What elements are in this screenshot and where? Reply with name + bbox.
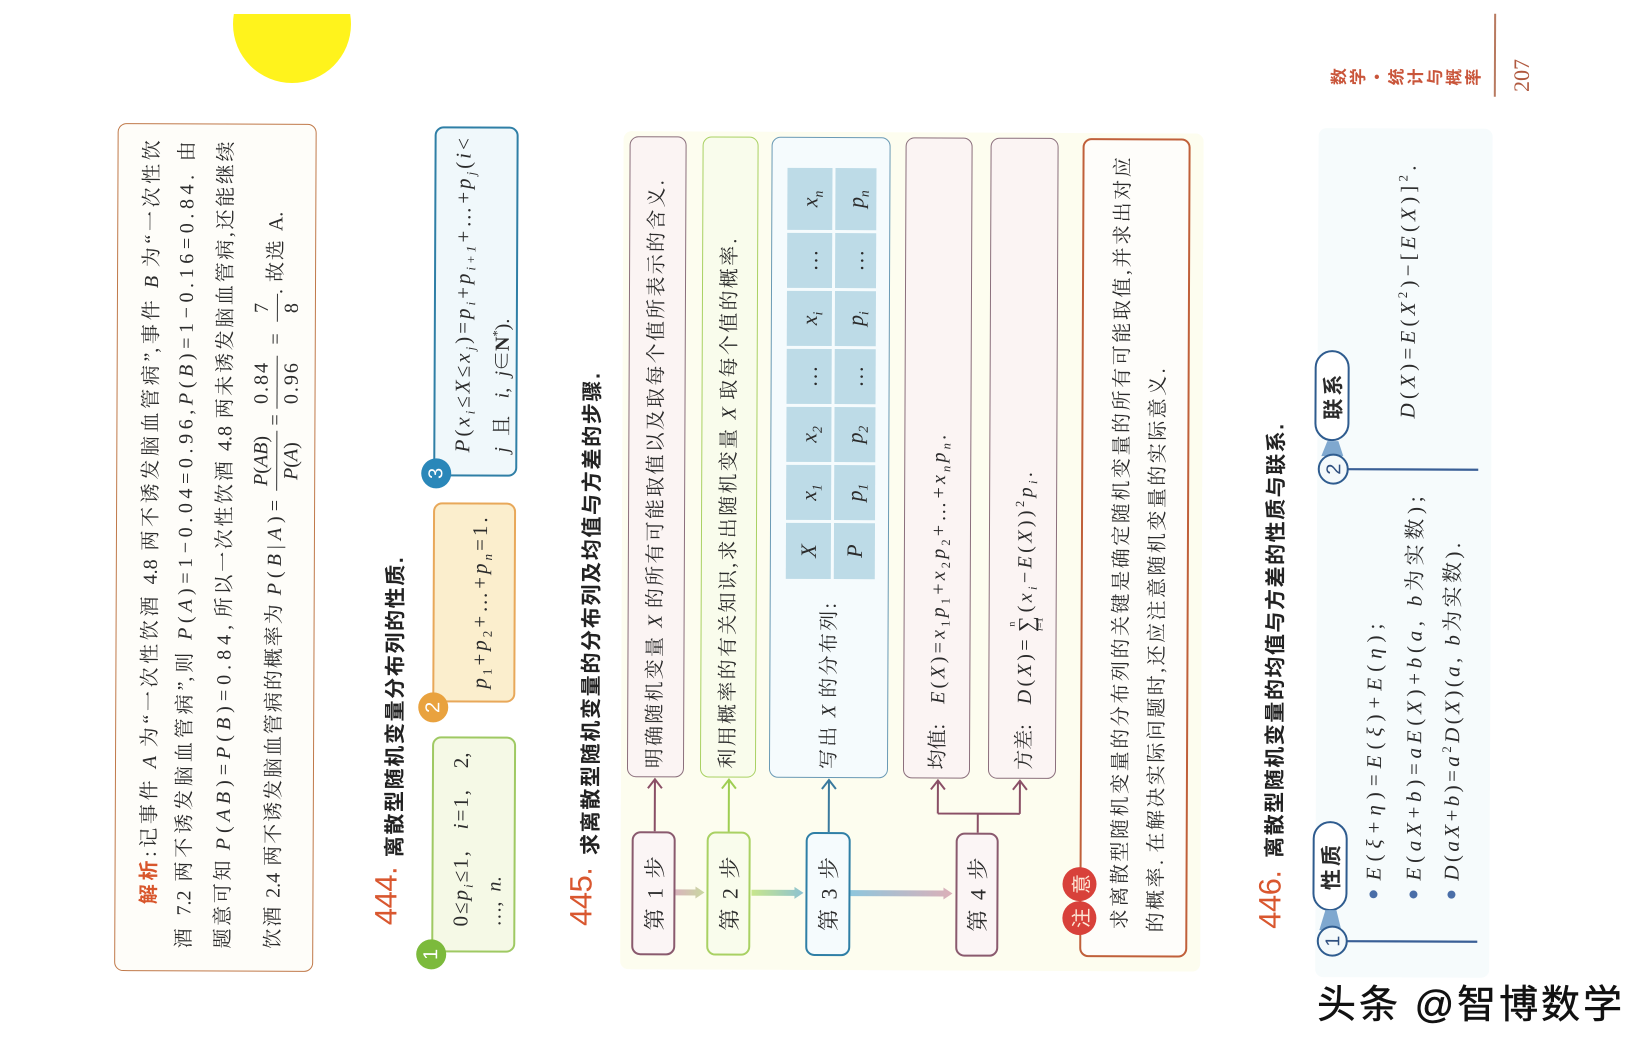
- property 3 formula: P(xi≤X≤xj)=pi+pi+1+…+pj(i<: [450, 135, 479, 453]
- variance formula: [1007, 469, 1046, 770]
- heading 445: [563, 373, 605, 926]
- property 1 formula: [448, 752, 506, 927]
- distribution table: xn: [797, 191, 825, 207]
- step details 2: [700, 136, 759, 778]
- variance formula: ∑: [1014, 616, 1039, 632]
- distribution table: p1: [842, 484, 870, 502]
- badge 1: 1: [420, 949, 442, 960]
- step box 1: 第 1 步: [642, 856, 667, 930]
- distribution table: …: [797, 249, 822, 271]
- panel: property 1: [431, 736, 516, 953]
- step 3 text: 写出 X 的分布列:: [818, 603, 841, 769]
- marker 2 with line: [1319, 441, 1478, 484]
- arrow: step 1 to step 2: [675, 886, 704, 898]
- distribution table: x1: [796, 484, 824, 501]
- marker 1 with line: [1318, 910, 1477, 956]
- properties pill: 性质: [1320, 842, 1343, 890]
- mean formula: E(X)=x1p1+x2p2+…+xnpn.: [927, 432, 953, 704]
- distribution table: pn: [843, 190, 871, 208]
- property 1 formula: 0≤pi≤1, i=1, 2,: [448, 752, 476, 927]
- solution text block: 0.96: [281, 361, 303, 404]
- property 1 formula: …, n.: [483, 877, 506, 927]
- step box 4: 第 4 步: [965, 858, 991, 932]
- decorative yellow thumb tab: [233, 14, 351, 83]
- distribution table: pi: [842, 311, 871, 326]
- distribution table: p2: [842, 426, 870, 444]
- mean formula: 均值:: [927, 724, 949, 770]
- attention badge: [1062, 867, 1096, 936]
- relation pill: [1314, 350, 1350, 441]
- chapter label: 数学・统计与概率: [1330, 69, 1484, 89]
- watermark: 头条 @智博数学: [1317, 984, 1622, 1027]
- solution text block: [138, 140, 303, 949]
- property 3 formula: [450, 135, 514, 455]
- properties bullets: E(ξ+η)=E(ξ)+E(η);: [1362, 618, 1387, 880]
- property 2 formula: p1+p2+…+pn=1.: [467, 514, 495, 689]
- title 446: 离散型随机变量的均值与方差的性质与联系.: [1264, 424, 1288, 858]
- step details 3 with table: [769, 137, 891, 778]
- panel: 446 background: [1315, 128, 1493, 978]
- solution text block: P(A): [280, 442, 302, 480]
- relation formula: D(X)=E(X2)−[E(X)]2.: [1395, 161, 1421, 418]
- variance formula: 方差:: [1014, 724, 1036, 770]
- badge 1: [416, 939, 446, 969]
- marker 1 with line: 1: [1322, 936, 1344, 947]
- note text: [1109, 157, 1170, 932]
- step box 2: [706, 832, 751, 956]
- step 1 text: 明确随机变量 X 的所有可能取值以及取每个值所表示的含义.: [644, 180, 668, 768]
- badge 3: [421, 458, 451, 488]
- step box 3: 第 3 步: [816, 857, 842, 931]
- solution text block: 饮酒 2.4 两不诱发脑血管病的概率为 P(B|A)=. 故选 A.: [262, 212, 287, 949]
- solution text block: 0.84: [251, 361, 273, 404]
- properties bullets: E(aX+b)=aE(X)+b(a, b为实数);: [1402, 492, 1427, 881]
- solution text block: P(AB): [250, 436, 272, 486]
- solution text block: 8: [281, 303, 303, 313]
- number 445: 445.: [563, 868, 599, 926]
- distribution table: X: [795, 544, 820, 558]
- distribution table: …: [843, 250, 868, 272]
- step box 2: 第 2 步: [717, 857, 742, 931]
- step details 4: variance: [988, 138, 1059, 779]
- step details 4: mean: [903, 137, 973, 779]
- fork arrow: step 4 to mean and variance: [931, 780, 1027, 833]
- number 446: 446.: [1252, 870, 1288, 929]
- step box 1: [631, 831, 676, 955]
- distribution table: …: [842, 366, 867, 388]
- panel: worked solution: [114, 123, 317, 972]
- arrow: step 3 to detail: [822, 780, 836, 832]
- badge 2: 2: [422, 702, 444, 713]
- solution text block: 7: [251, 303, 273, 313]
- distribution table: [786, 168, 876, 580]
- step box 3: [805, 832, 851, 956]
- badge 3: 3: [425, 468, 447, 479]
- arrow: step 2 to detail: [722, 780, 736, 832]
- property 3 formula: j 且 i, j∈N*).: [490, 319, 514, 453]
- arrow: step 2 to step 3: [751, 887, 803, 899]
- heading 444: [368, 557, 408, 925]
- solution text block: =: [265, 414, 287, 426]
- step details 1: [627, 136, 687, 777]
- properties bullets: D(aX+b)=a2D(X)(a, b为实数).: [1439, 539, 1465, 881]
- panel: property 3: [433, 126, 519, 477]
- marker 2 with line: 2: [1323, 464, 1345, 475]
- solution text block: 酒 7.2 两不诱发脑血管病”,则 P(A)=1−0.04=0.96,P(B)=1−0.16=0.84. 由: [173, 141, 199, 948]
- header rule: [1494, 14, 1496, 97]
- solution text block: 题意可知 P(AB)=P(B)=0.84,所以一次性饮酒 4.8 两未诱发脑血管病,还能继续: [212, 141, 238, 949]
- properties pill: [1312, 821, 1348, 911]
- badge 2: [418, 692, 448, 722]
- distribution table: P: [841, 544, 866, 558]
- note text: 的概率. 在解决实际问题时,还应注意随机变量的实际意义.: [1145, 368, 1170, 932]
- note text: 求离散型随机变量的分布列的关键是确定随机变量的所有可能取值,并求出对应: [1109, 157, 1135, 929]
- properties bullets: [1362, 492, 1465, 899]
- attention badge: 意: [1071, 874, 1093, 894]
- panel: property 2: [432, 502, 516, 703]
- solution text block: 解析:记事件 A 为“一次性饮酒 4.8 两不诱发脑血管病”,事件 B 为“一次性饮: [138, 140, 164, 904]
- arrow: step 3 to step 4: [850, 887, 952, 900]
- distribution table: x2: [796, 426, 824, 443]
- running header: [1330, 14, 1534, 97]
- solution text block: =: [265, 333, 287, 345]
- panel: 445 flow background: [620, 131, 1204, 972]
- relation pill: 联系: [1322, 372, 1345, 420]
- step 2 text: 利用概率的有关知识,求出随机变量 X 取每个值的概率.: [717, 239, 741, 769]
- distribution table: …: [796, 365, 821, 387]
- distribution table: xi: [796, 312, 825, 325]
- step box 4: [955, 833, 999, 957]
- page number: 207: [1509, 59, 1534, 92]
- title 444: 离散型随机变量分布列的性质.: [384, 557, 408, 857]
- heading 446: [1252, 424, 1288, 929]
- variance formula: n i=1: [1007, 617, 1046, 631]
- attention badge: 注: [1071, 908, 1093, 928]
- number 444: 444.: [368, 867, 404, 925]
- note box: [1079, 138, 1191, 958]
- title 445: 求离散型随机变量的分布列及均值与方差的步骤.: [580, 373, 605, 855]
- variance formula: D(X)=(xi−E(X))2pi.: [1013, 469, 1040, 704]
- arrow: step 1 to detail: [648, 779, 662, 831]
